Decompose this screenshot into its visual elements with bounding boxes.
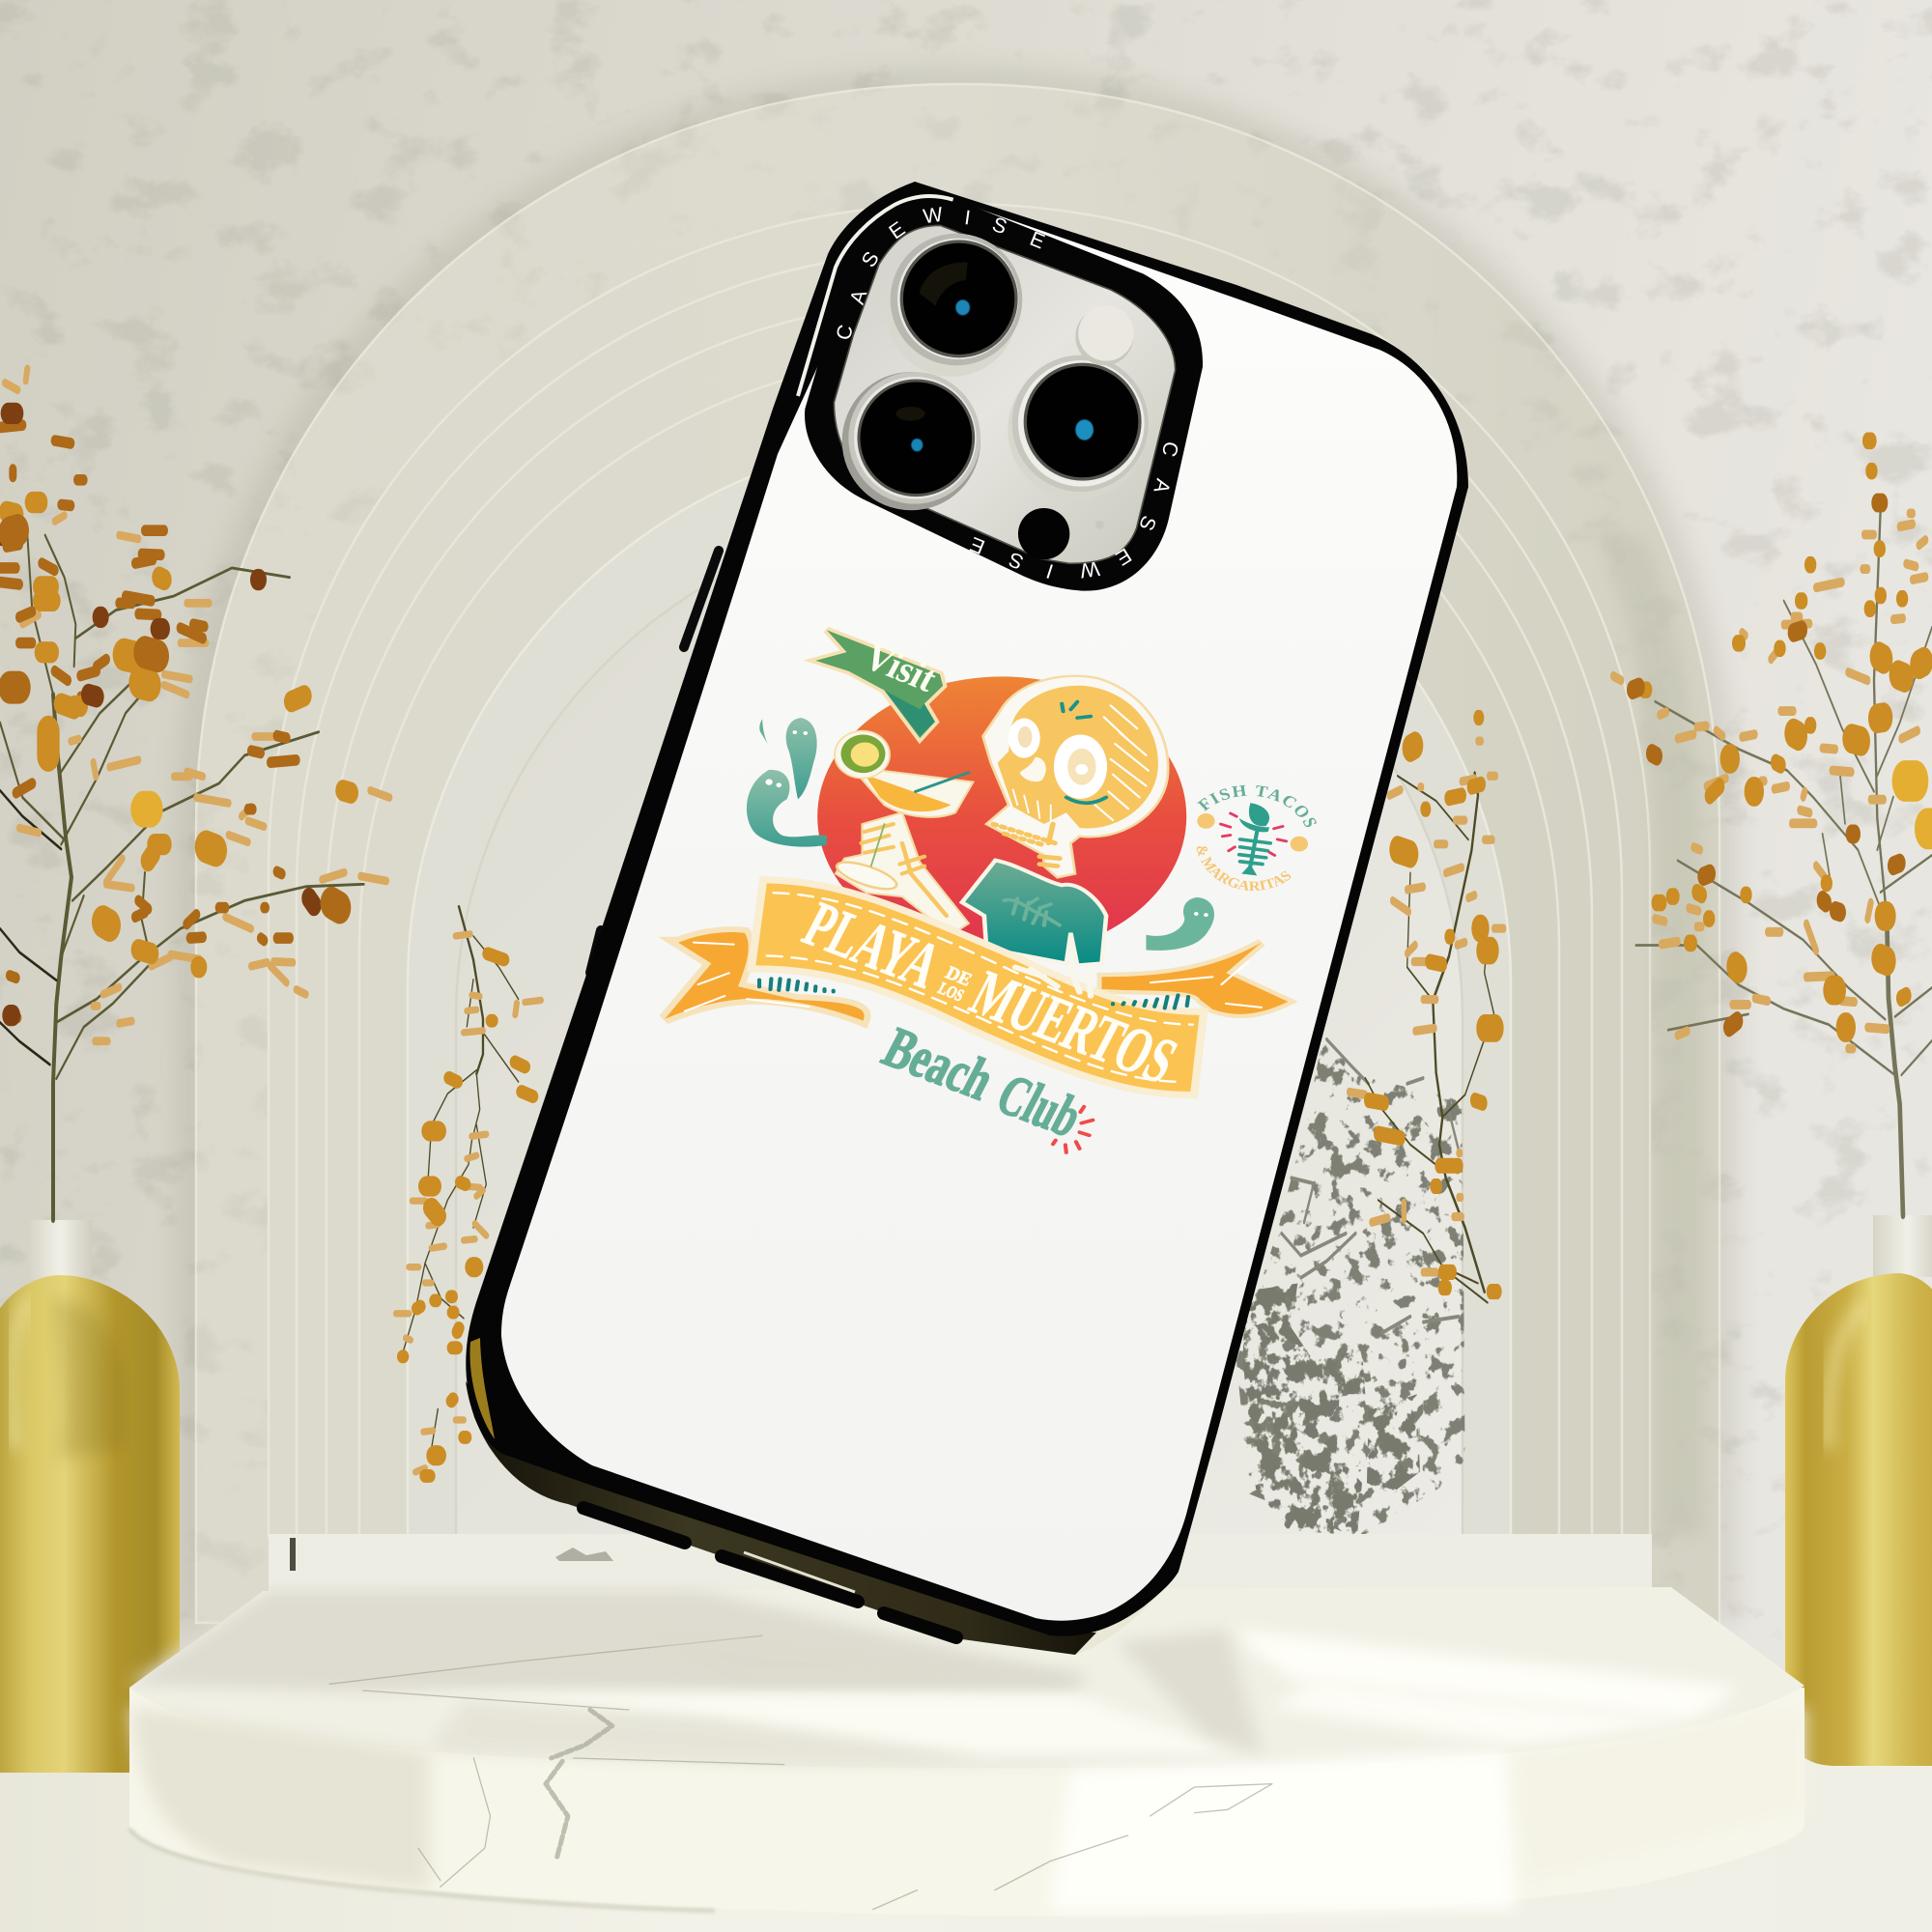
ghosts [747,718,1214,951]
lidar sensor [1018,508,1069,559]
casewise lettering: S [857,247,884,271]
camera island [798,196,1203,591]
banner title [792,888,1188,1097]
casewise lettering: S [1006,548,1027,574]
tacos badge [1196,784,1317,891]
casewise lettering: C [832,323,858,343]
left tree [0,369,389,1220]
right vase [1785,1215,1932,1766]
casewise lettering: S [989,213,1010,239]
fish skeleton [1239,803,1270,875]
banner title: DE [942,963,975,990]
casewise lettering: E [1027,227,1048,253]
case black body [466,182,1468,1636]
flash [1075,305,1134,365]
lens 3 [1008,355,1149,499]
platform top surface [129,1587,1804,1769]
casewise lettering: I [963,206,972,230]
tacos badge: & MARGARITAS [1196,846,1291,891]
main banner ribbon [755,883,1200,1092]
visit flag [815,630,945,738]
platform marble veins [329,1635,1272,1910]
casewise lettering: E [1112,543,1136,570]
platform front face [129,1688,1804,1917]
hanging vine left [396,906,541,1476]
skull [982,676,1168,877]
bottom ports [583,1508,956,1637]
left tree branches [0,535,364,1220]
gold reflection on case corner [470,1338,495,1439]
shadow around arch [193,84,1719,1623]
hanging vine right [1350,718,1504,1303]
visit flag: Visit [857,636,945,700]
port highlight [744,1552,855,1592]
casewise lettering: W [922,203,945,228]
platform light and shadow [129,1591,1804,1910]
banner title: PLAYA [792,888,952,1002]
case bottom side [466,1381,1096,1655]
casewise lettering: W [1078,556,1101,582]
banner dot ornaments [759,979,1188,1009]
right tree [1613,440,1932,1215]
banner stitching [767,893,1193,1082]
lens 2 [842,372,980,510]
casewise lettering: S [1134,512,1161,534]
beach club text: Club [987,1063,1092,1149]
skeleton fingers over banner [1015,967,1091,996]
camera plate [834,225,1176,563]
red sun [817,676,1186,956]
vine left stems [403,906,519,1448]
banner left tail [665,932,865,1021]
margarita glass and skeleton hand [833,731,973,935]
casewise lettering: E [967,532,988,558]
marble shadow veins on inner wall [1236,1034,1465,1538]
vine left leaves [396,934,541,1476]
vine right stems [1365,773,1497,1303]
left tree leaves [0,369,389,1041]
casewise lettering [832,203,1183,583]
screen back [501,201,1457,1621]
red sparks [1053,1107,1093,1152]
tacos badge: FISH TACOS [1197,784,1317,827]
phone shadow on platform [618,1623,1082,1686]
beach club text: Beach [873,1015,1005,1112]
white rim strip [798,196,953,396]
casewise lettering: A [845,286,871,307]
playa de los muertos artwork [658,627,1317,1154]
casewise lettering: C [1157,439,1183,459]
casewise lettering: A [1149,476,1175,497]
phone [466,182,1468,1655]
casewise lettering: I [1043,559,1056,583]
banner right tail [1102,943,1288,1014]
cream case corner [1005,1567,1180,1655]
casewise lettering: E [885,217,909,244]
right tree leaves [1613,440,1932,1048]
teal shirt [962,861,1106,965]
stepped arch niche [196,84,1719,1623]
banner title: LOS [934,980,967,1006]
marble platform [129,1587,1804,1917]
left vase [0,1220,180,1773]
vine right leaves [1350,718,1504,1292]
lens 1 [886,234,1022,377]
ground [0,1758,1932,1932]
side buttons [590,551,719,973]
microphone [1095,521,1104,529]
right tree branches [1635,511,1932,1215]
banner title: MUERTOS [959,956,1188,1097]
floor band [269,1534,1652,1602]
platform base shadow [129,1829,715,1911]
